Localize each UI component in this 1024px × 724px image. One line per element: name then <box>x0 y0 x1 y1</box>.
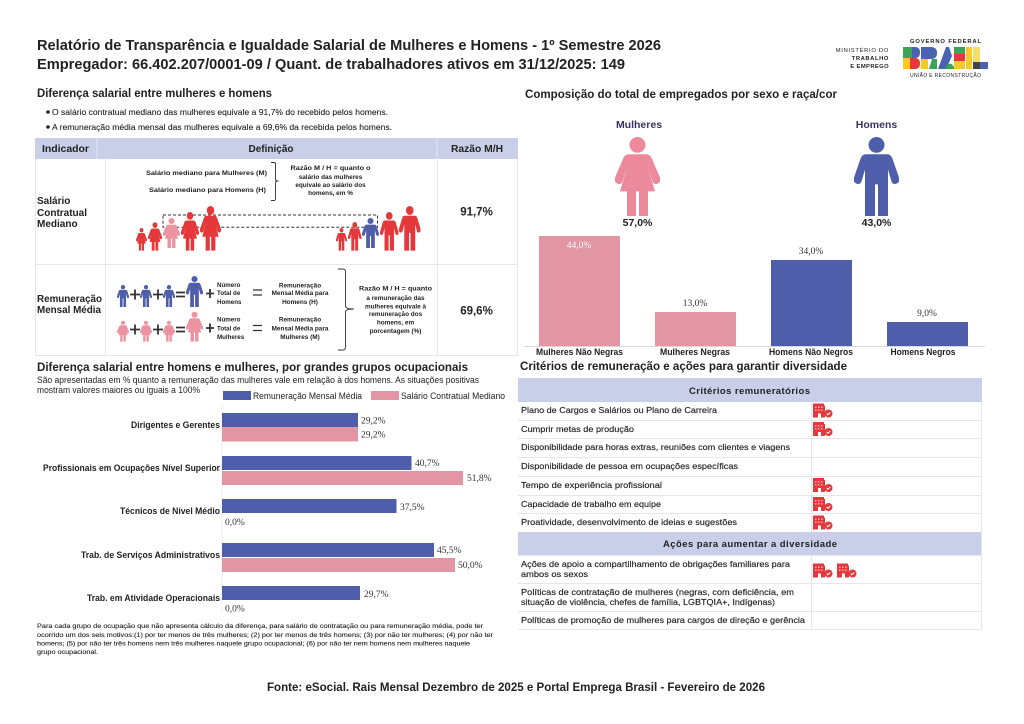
group: técnicos: 37,5% <box>400 503 425 513</box>
logo: ministério: E EMPREGO <box>850 64 889 70</box>
row label: salário contratual mediano: Salário <box>37 196 70 207</box>
group: técnicos: Técnicos de Nível Médio <box>120 506 221 516</box>
group: operacional <box>87 586 389 614</box>
group: operacional: 0,0% <box>225 604 245 614</box>
formula: homens: Mensal Média para <box>272 290 329 297</box>
bar chart: grupos ocupacionais <box>43 405 492 614</box>
rows: critérios: Disponibilidade para horas extras, reuniões com clientes e viagens <box>521 442 790 452</box>
footnote: homens; (5) por não ter três homens nem três mulheres naquele grupo ocupacional; (6) por não ter nem homens nem mulheres naquele <box>37 640 470 648</box>
formula: homens <box>117 276 329 307</box>
heading: critérios: Critérios de remuneração e ações para garantir diversidade <box>520 359 847 373</box>
bar chart: composição raça/cor: Homens Negros <box>890 347 956 357</box>
title: Relatório de Transparência e Igualdade Salarial de Mulheres e Homens - 1º Semestre 2026 <box>37 38 661 54</box>
group: dirigentes: 29,2% <box>361 430 386 440</box>
group: profissionais: 40,7% <box>415 459 440 469</box>
brace <box>271 162 278 200</box>
row label: salário contratual mediano: Contratual <box>37 208 87 219</box>
ratio text: homens, em % <box>308 190 353 197</box>
formula: homens: Homens (H) <box>282 299 318 306</box>
panel: tabela indicador <box>35 138 518 356</box>
value: 69,6%: 69,6% <box>460 306 493 318</box>
subtext: mostram valores maiores ou iguais a 100% <box>37 385 200 395</box>
group: dirigentes <box>131 413 386 442</box>
rows: ações: Políticas de contratação de mulheres (negras, com deficiência, em <box>521 587 794 597</box>
ratio text <box>290 165 371 197</box>
ratio text 2: homens, em <box>377 320 414 326</box>
formula: mulheres: Remuneração <box>279 316 321 324</box>
rows: ações: ambos os sexos <box>521 569 588 579</box>
formula: mulheres: Mulheres <box>217 334 245 341</box>
panel: mulheres total: 57,0% <box>623 217 653 229</box>
formula: mulheres: Total de <box>217 326 241 332</box>
formula: homens: Número <box>217 282 241 289</box>
bar chart: composição raça/cor: 13,0% <box>683 299 707 309</box>
logo: governo federal brasil: GOVERNO FEDERAL <box>910 39 981 45</box>
formula: homens: Homens <box>217 299 242 306</box>
heading: diferença salarial: Diferença salarial entre mulheres e homens <box>37 86 272 100</box>
group: serviços administrativos: 45,5% <box>437 546 462 556</box>
formula: mulheres: Mensal Média para <box>272 326 329 332</box>
group: serviços administrativos: 50,0% <box>458 561 483 571</box>
dashed comparison box <box>163 215 378 227</box>
panel: homens total: 43,0% <box>862 217 892 229</box>
definition labels: Salário mediano para Mulheres (M) <box>146 170 267 177</box>
panel: critérios table <box>518 378 982 630</box>
bar chart: composição raça/cor: 34,0% <box>799 247 823 257</box>
rows: ações: Ações de apoio a compartilhamento de obrigações familiares para <box>521 559 790 569</box>
ratio text 2: Razão M / H = quanto <box>359 286 432 292</box>
rows: ações <box>521 559 805 625</box>
logo: governo federal brasil <box>903 39 988 79</box>
group: profissionais: 51,8% <box>467 474 492 484</box>
ratio text 2 <box>359 286 432 335</box>
panel: homens total: Homens <box>856 119 897 131</box>
section: critérios remuneratórios: Critérios remuneratórios <box>689 386 810 397</box>
group: serviços administrativos <box>81 543 483 572</box>
icons: ações <box>813 564 856 578</box>
row label: remuneração mensal média: Mensal Média <box>37 305 101 316</box>
legend: Salário Contratual Mediano <box>401 391 505 402</box>
panel: mulheres total <box>615 119 662 229</box>
footer source: Fonte: eSocial. Rais Mensal Dezembro de 2025 e Portal Emprega Brasil - Fevereiro de 2026 <box>267 682 765 694</box>
group: dirigentes: 29,2% <box>361 416 386 426</box>
logo: ministério: TRABALHO <box>852 56 889 62</box>
logo: ministério: MINISTÉRIO DO <box>836 47 889 54</box>
footnote <box>37 623 494 656</box>
legend: Remuneração Mensal Média <box>253 391 363 402</box>
formula: homens: Total de <box>217 290 241 297</box>
ratio text 2: remuneração dos <box>369 311 423 318</box>
heading: composição: Composição do total de empregados por sexo e raça/cor <box>525 87 837 101</box>
formula: mulheres: Número <box>217 316 241 324</box>
brace 2 <box>338 269 354 350</box>
table header: Razão M/H <box>451 144 503 155</box>
rows: critérios: Plano de Cargos e Salários ou Plano de Carreira <box>521 405 717 415</box>
bar chart: composição raça/cor: Mulheres Negras <box>660 347 730 357</box>
row label: salário contratual mediano <box>37 196 87 230</box>
table header <box>42 144 503 155</box>
rows: critérios: Proatividade, desenvolvimento de ideias e sugestões <box>521 517 737 527</box>
footnote: Para cada grupo de ocupação que não apresenta cálculo da diferença, para salário de contratação ou para remuneração média, pode ter <box>37 623 484 630</box>
ratio text: salário das mulheres <box>299 174 363 181</box>
bar chart: composição raça/cor: Homens Não Negros <box>769 347 853 357</box>
panel: homens total <box>854 119 899 229</box>
logo: governo federal brasil: UNIÃO E RECONSTRUÇÃO <box>910 72 981 79</box>
rows: critérios <box>521 405 790 527</box>
icons: homens <box>336 206 421 251</box>
rows: critérios: Tempo de experiência profissional <box>521 480 662 490</box>
icons: mulheres <box>136 206 221 251</box>
rows: critérios: Capacidade de trabalho em equipe <box>521 499 661 509</box>
ratio text: Razão M / H = quanto o <box>290 165 371 172</box>
heading: grandes grupos: Diferença salarial entre homens e mulheres, por grandes grupos ocupacionais <box>37 360 468 374</box>
formula: mulheres: Mulheres (M) <box>280 334 320 341</box>
row label: remuneração mensal média <box>37 294 102 316</box>
bullets <box>46 107 392 132</box>
value: 91,7%: 91,7% <box>460 206 493 218</box>
title <box>37 38 661 73</box>
bar chart: composição raça/cor: Mulheres Não Negras <box>536 347 623 357</box>
table header: Indicador <box>42 144 89 155</box>
group: profissionais: Profissionais em Ocupações Nível Superior <box>43 463 221 473</box>
definition labels <box>146 170 267 194</box>
legend <box>223 391 505 402</box>
subtext: São apresentadas em % quanto a remuneração das mulheres vale em relação à dos homens. As situações positivas <box>37 375 479 385</box>
bar chart: composição raça/cor <box>523 236 985 357</box>
row label: remuneração mensal média: Remuneração <box>37 294 102 305</box>
rows: ações: situação de violência, chefes de família, LGBTQIA+, Indígenas) <box>521 597 775 607</box>
group: serviços administrativos: Trab. de Serviços Administrativos <box>81 550 220 560</box>
rows: critérios: Cumprir metas de produção <box>521 424 634 434</box>
logo: ministério <box>836 47 889 70</box>
section: ações: Ações para aumentar a diversidade <box>663 539 837 550</box>
group: operacional: Trab. em Atividade Operacionais <box>87 593 220 603</box>
icons: critérios <box>813 404 832 530</box>
bar chart: composição raça/cor: 9,0% <box>917 309 937 319</box>
ratio text 2: mulheres equivale à <box>365 304 426 310</box>
panel: mulheres total: Mulheres <box>616 119 662 131</box>
group: técnicos <box>120 499 425 528</box>
bullets: A remuneração média mensal das mulheres equivale a 69,6% da recebida pelos homens. <box>52 122 392 132</box>
ratio text 2: porcentagem (%) <box>370 328 421 335</box>
group: operacional: 29,7% <box>364 590 389 600</box>
rows: critérios: Disponibilidade de pessoa em ocupações específicas <box>521 461 738 471</box>
row label: salário contratual mediano: Mediano <box>37 219 78 230</box>
formula: homens: Remuneração <box>279 282 321 290</box>
formula: mulheres <box>117 312 329 342</box>
bullets: O salário contratual mediano das mulheres equivale a 91,7% do recebido pelos homens. <box>52 107 388 117</box>
definition labels: Salário mediano para Homens (H) <box>149 187 266 194</box>
footnote: grupo ocupacional. <box>37 649 98 656</box>
group: técnicos: 0,0% <box>225 518 245 528</box>
group: dirigentes: Dirigentes e Gerentes <box>131 420 220 430</box>
footnote: ocorrido um dos seis motivos:(1) por ter menos de três mulheres; (2) por ter menos de três homens; (3) por não ter mulheres; (4) por não ter <box>37 632 494 639</box>
bar chart: composição raça/cor: 44,0% <box>567 241 591 251</box>
group: profissionais <box>43 456 492 485</box>
ratio text: equivale ao salário dos <box>295 182 366 189</box>
subtext <box>37 375 479 395</box>
table header: Definição <box>248 144 294 155</box>
ratio text 2: a remuneração das <box>366 295 425 302</box>
title: Empregador: 66.402.207/0001-09 / Quant. de trabalhadores ativos em 31/12/2025: 149 <box>37 57 625 73</box>
rows: ações: Políticas de promoção de mulheres para cargos de direção e gerência <box>521 615 805 625</box>
